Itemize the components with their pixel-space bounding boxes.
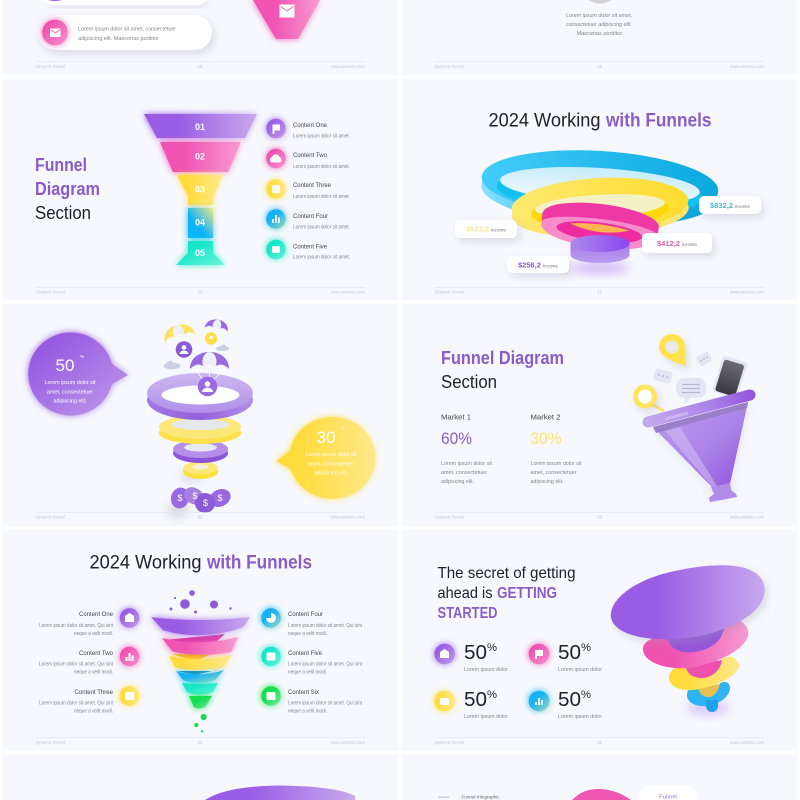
list item: content one bbox=[266, 119, 350, 140]
title bbox=[90, 552, 312, 574]
item: content four: Content Four bbox=[288, 611, 324, 618]
stat: pink: Lorem ipsum dolor bbox=[558, 667, 602, 673]
footer: www.website.com bbox=[730, 514, 764, 520]
stat: blue: % bbox=[581, 689, 591, 701]
label: 412,2 bbox=[642, 233, 712, 253]
callout: 50 percent: amet, consectetuer bbox=[47, 390, 93, 396]
list item: content four: Lorem ipsum dolor sit amet. bbox=[293, 224, 350, 230]
list item: content five: Lorem ipsum dolor sit amet. bbox=[293, 254, 350, 260]
item: content three: Lorem ipsum dolor sit amet. Qui sint bbox=[39, 700, 113, 706]
heading bbox=[35, 154, 100, 223]
footer bbox=[36, 512, 365, 520]
list item: content two: Content Two bbox=[293, 152, 327, 159]
item: content six: neque a velit modi. bbox=[288, 708, 327, 714]
footer: 18 bbox=[197, 64, 203, 69]
footer: www.website.com bbox=[730, 290, 764, 294]
funnel chart: 01 bbox=[195, 122, 205, 132]
list item: content five bbox=[266, 240, 350, 260]
market 2: amet, consectetuer bbox=[530, 470, 577, 476]
footer: www.website.com bbox=[730, 64, 764, 69]
list item: content two: Lorem ipsum dolor sit amet. bbox=[293, 164, 350, 170]
dots: purple bbox=[170, 590, 232, 614]
italic text: Lorem ipsum dolor sit amet, bbox=[566, 13, 632, 19]
list pill partial bbox=[43, 0, 207, 6]
footer: Dynamic Funnel bbox=[36, 514, 65, 520]
footer: www.website.com bbox=[331, 514, 365, 520]
callout: 30 percent: 30 bbox=[316, 428, 336, 447]
disk: purple bbox=[570, 235, 630, 274]
ring: yellow bbox=[510, 173, 690, 242]
label: 256,2: $256,2 bbox=[518, 260, 541, 270]
illustration: organic funnel bbox=[611, 565, 765, 715]
callout: 50 percent: adipiscing elit. bbox=[54, 398, 86, 404]
label: 832,2 bbox=[699, 196, 761, 214]
item: content two bbox=[39, 647, 139, 675]
item: content four bbox=[261, 608, 362, 637]
illustration: coins bbox=[168, 484, 234, 518]
footer: Dynamic Funnel bbox=[435, 64, 464, 69]
footer: www.website.com bbox=[331, 64, 365, 69]
funnel chart: 03 bbox=[195, 184, 205, 194]
market 2 bbox=[530, 412, 582, 485]
heading: Section bbox=[441, 372, 497, 392]
italic text: consectetuer adipiscing elit. bbox=[566, 22, 632, 28]
panel: slide 26 partial bbox=[3, 755, 398, 800]
footer: Dynamic Funnel bbox=[36, 64, 65, 69]
ring: pink bbox=[539, 197, 661, 255]
footer: Dynamic Funnel bbox=[36, 290, 65, 294]
funnel tip: pink bbox=[253, 0, 320, 39]
stat: blue: 50 bbox=[558, 689, 581, 711]
stat: pink: % bbox=[581, 642, 591, 654]
icon: phone bbox=[712, 355, 748, 399]
illustration: ring funnel bbox=[147, 373, 253, 482]
market 1: 60% bbox=[441, 429, 472, 448]
icon: chat bubbles bbox=[653, 351, 713, 404]
stat: purple: Lorem ipsum dolor bbox=[464, 667, 508, 673]
stat: purple: 50 bbox=[464, 642, 487, 664]
footer bbox=[435, 737, 764, 745]
title: 2024 Working bbox=[90, 552, 202, 574]
callout: 30 percent: amet, consectetuer bbox=[308, 462, 354, 468]
list item: content three bbox=[266, 179, 350, 200]
footer: www.website.com bbox=[730, 740, 764, 745]
title bbox=[488, 110, 712, 132]
item: content one: Content One bbox=[79, 611, 113, 618]
heading: The secret of getting bbox=[438, 565, 576, 582]
panel: slide 23 funnel diagram section bbox=[402, 304, 797, 526]
footer: 20 bbox=[197, 290, 203, 294]
item: content five: Content Five bbox=[288, 650, 322, 657]
item: content six bbox=[261, 686, 362, 714]
clouds bbox=[164, 344, 229, 369]
item: content three: Content Three bbox=[74, 689, 113, 696]
label: 256,2: income bbox=[543, 264, 558, 268]
callout: 30 percent: adipiscing elit. bbox=[314, 470, 348, 476]
parachute: right bbox=[205, 318, 229, 345]
market 2: adipiscing elit. bbox=[530, 479, 564, 485]
label: 523,2: income bbox=[491, 228, 506, 232]
panel: slide 20 funnel diagram bbox=[3, 79, 398, 300]
parachute: left bbox=[162, 321, 195, 358]
label: 256,2 bbox=[507, 256, 569, 273]
pink shape partial bbox=[572, 789, 631, 800]
label: 523,2: $523,2 bbox=[466, 224, 489, 234]
footer: www.website.com bbox=[331, 740, 365, 745]
footer bbox=[435, 61, 764, 69]
callout: 50 percent: % bbox=[80, 354, 84, 359]
heading: GETTING bbox=[497, 585, 557, 602]
list pill: email: adipiscing elit. Maecenas porttitor bbox=[78, 36, 159, 42]
funnel chart: 02 bbox=[195, 152, 205, 162]
item: content five bbox=[261, 647, 362, 675]
ring: blue bbox=[479, 144, 720, 232]
title: with Funnels bbox=[605, 110, 712, 132]
panel: slide 21 working with funnels rings bbox=[402, 79, 797, 300]
illustration: coins: $ bbox=[217, 493, 223, 503]
panel: slide 25 secret of getting ahead bbox=[402, 530, 797, 751]
market 2: 30% bbox=[530, 429, 562, 448]
list item: content three: Content Three bbox=[293, 182, 331, 189]
ellipse top partial bbox=[205, 786, 355, 800]
callout: 50 percent: Lorem ipsum dolor sit bbox=[44, 380, 96, 386]
item: content two: Lorem ipsum dolor sit amet. Qui sint bbox=[39, 662, 113, 668]
illustration: coins: $ bbox=[192, 491, 198, 501]
callout: 50 percent bbox=[28, 332, 128, 415]
list item: content four: Content Four bbox=[293, 213, 329, 220]
stat: pink: 50 bbox=[558, 642, 581, 664]
footer: www.website.com bbox=[331, 290, 365, 294]
item: content six: Content Six bbox=[288, 689, 320, 696]
item: content five: neque a velit modi. bbox=[288, 669, 327, 675]
funnel chart: 04 bbox=[195, 218, 205, 228]
stat: yellow: % bbox=[487, 689, 497, 701]
stat: yellow: Lorem ipsum dolor bbox=[464, 714, 508, 720]
heading: Diagram bbox=[35, 178, 100, 199]
label: 832,2: $832,2 bbox=[710, 201, 733, 210]
heading bbox=[438, 565, 576, 622]
item: content four: neque a velit modi. bbox=[288, 631, 327, 637]
footer bbox=[435, 287, 764, 294]
market 1: adipiscing elit. bbox=[441, 479, 474, 485]
footer: 21 bbox=[597, 290, 602, 294]
stat: pink bbox=[529, 642, 602, 673]
footer: 22 bbox=[197, 514, 203, 520]
footer: 19 bbox=[597, 64, 602, 69]
item: content two: Content Two bbox=[79, 650, 113, 657]
market 2: Lorem ipsum dolor sit bbox=[530, 461, 582, 467]
item: content six: Lorem ipsum dolor sit amet. Qui sint bbox=[288, 700, 362, 706]
illustration: coins: $ bbox=[177, 493, 183, 503]
italic text: Maecenas porttitor. bbox=[576, 31, 624, 37]
item: content five: Lorem ipsum dolor sit amet. Qui sint bbox=[288, 662, 362, 668]
item: content three: neque a velit modi. bbox=[74, 708, 113, 714]
callout: 30 percent: Lorem ipsum dolor sit bbox=[306, 452, 357, 458]
footer: Dynamic Funnel bbox=[435, 290, 464, 294]
label: 523,2 bbox=[455, 220, 517, 238]
illustration: purple funnel bbox=[633, 334, 750, 502]
footer bbox=[36, 737, 365, 745]
label: 412,2: income bbox=[682, 242, 697, 247]
title: 2024 Working bbox=[488, 110, 600, 132]
panel: slide 18 bbox=[3, 0, 398, 75]
footer bbox=[435, 512, 764, 520]
heading: Funnel bbox=[35, 154, 87, 175]
dots: green bbox=[194, 714, 207, 732]
item: content one: neque a velit modi. bbox=[74, 631, 113, 637]
footer: Dynamic Funnel bbox=[36, 740, 65, 745]
footer: 23 bbox=[597, 514, 602, 520]
item: content two: neque a velit modi. bbox=[74, 669, 113, 675]
panel: slide 27 partial bbox=[402, 755, 797, 800]
market 1: Lorem ipsum dolor sit bbox=[441, 461, 492, 467]
heading: ahead is bbox=[438, 585, 492, 602]
list item: content five: Content Five bbox=[293, 244, 327, 250]
illustration: coins: $ bbox=[203, 498, 208, 508]
callout: 50 percent: 50 bbox=[56, 356, 74, 375]
item: content one: Lorem ipsum dolor sit amet. Qui sint bbox=[39, 623, 113, 629]
market 1 bbox=[441, 412, 492, 485]
list pill: email bbox=[38, 15, 212, 50]
item: content four: Lorem ipsum dolor sit amet. Qui sint bbox=[288, 623, 362, 629]
footer: 25 bbox=[597, 740, 602, 745]
market 1: amet, consectetuer bbox=[441, 470, 487, 476]
footer: Dynamic Funnel bbox=[435, 514, 464, 520]
footer bbox=[36, 61, 365, 69]
callout: 30 percent bbox=[276, 417, 375, 499]
funnel chart bbox=[144, 114, 257, 265]
item: content one bbox=[39, 608, 139, 637]
pill: funnel bbox=[639, 785, 697, 800]
label: 832,2: income bbox=[735, 204, 750, 209]
parachute: center bbox=[190, 352, 229, 396]
chart: funnel layers bbox=[151, 590, 250, 732]
list item: content two bbox=[266, 149, 350, 170]
footer bbox=[36, 287, 365, 294]
italic text bbox=[566, 13, 632, 37]
icon: location pin bbox=[659, 334, 686, 366]
stat: yellow bbox=[434, 689, 508, 720]
icon: magnifier bbox=[633, 384, 664, 411]
label: funnel infographic bbox=[438, 794, 500, 800]
heading: Section bbox=[35, 202, 91, 223]
list item: content one: Content One bbox=[293, 122, 327, 129]
list pill: email: Lorem ipsum dolor sit amet, consectetuer bbox=[78, 26, 176, 32]
market 1: Market 1 bbox=[441, 412, 471, 422]
label: 412,2: $412,2 bbox=[657, 239, 680, 248]
stat: yellow: 50 bbox=[464, 689, 487, 711]
footer: 24 bbox=[197, 740, 203, 745]
heading bbox=[441, 348, 564, 392]
callout: 30 percent: % bbox=[341, 426, 345, 431]
panel: slide 19 bbox=[402, 0, 797, 75]
stat: blue bbox=[529, 689, 602, 720]
stat: purple bbox=[434, 642, 508, 673]
illustration: parachutes bbox=[162, 318, 229, 396]
stat: blue: Lorem ipsum dolor bbox=[558, 714, 602, 720]
grey circle partial bbox=[589, 0, 611, 4]
list item: content three: Lorem ipsum dolor sit amet. bbox=[293, 194, 350, 200]
item: content three bbox=[39, 686, 139, 714]
panel: slide 24 layered funnel bbox=[3, 530, 398, 751]
stat: purple: % bbox=[487, 642, 497, 654]
market 2: Market 2 bbox=[530, 412, 560, 422]
title: with Funnels bbox=[206, 552, 312, 574]
heading: Funnel Diagram bbox=[441, 348, 564, 368]
heading: STARTED bbox=[438, 605, 498, 622]
list item: content four bbox=[266, 209, 350, 230]
panel: slide 22 funnel with parachutes bbox=[3, 304, 398, 526]
funnel cone bbox=[648, 395, 750, 502]
list item: content one: Lorem ipsum dolor sit amet. bbox=[293, 134, 350, 140]
footer: Dynamic Funnel bbox=[435, 740, 464, 745]
funnel chart: 05 bbox=[195, 248, 205, 258]
